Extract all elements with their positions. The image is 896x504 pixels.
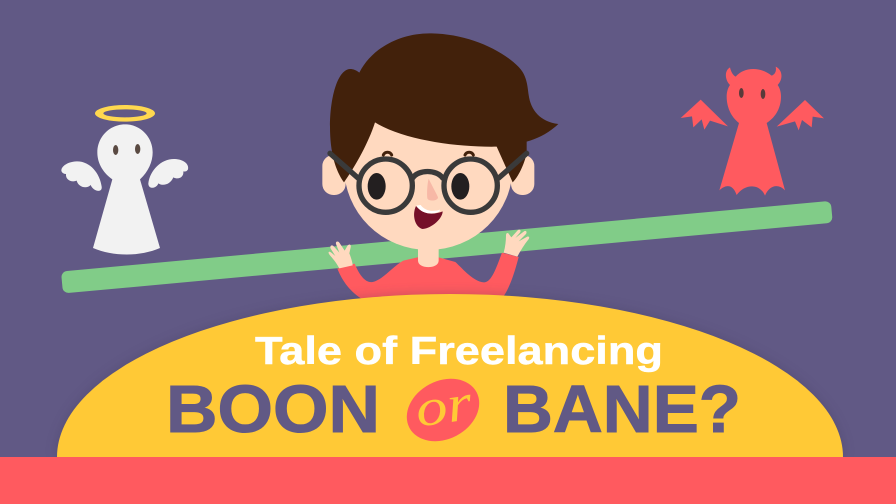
angel body <box>93 124 160 254</box>
ears <box>322 155 534 195</box>
right hand <box>504 230 529 257</box>
badge: or: or <box>412 374 476 439</box>
nose <box>427 179 438 200</box>
seesaw plank <box>61 201 833 293</box>
devil eyes <box>739 88 765 99</box>
neck <box>418 243 439 267</box>
angel <box>61 105 188 254</box>
left wing <box>681 100 728 130</box>
title: Tale of Freelancing: Tale of Freelancing <box>255 330 663 373</box>
angel eyes <box>113 144 140 155</box>
halo <box>95 105 155 122</box>
left wing <box>61 161 102 191</box>
right wing <box>777 100 824 130</box>
glasses <box>330 153 527 212</box>
head <box>344 83 513 250</box>
heading: BANE?: BANE? <box>503 372 741 447</box>
devil body <box>719 67 785 196</box>
badge: or <box>396 367 490 453</box>
yellow dome <box>57 294 843 457</box>
devil <box>681 67 824 196</box>
right wing <box>148 159 188 188</box>
bottom band <box>0 457 896 504</box>
character: freelancer <box>322 33 558 300</box>
heading: BOON: BOON <box>166 372 380 447</box>
eyebrows <box>383 152 473 155</box>
eyes <box>368 173 469 200</box>
dome shadow <box>57 294 843 457</box>
left hand <box>329 242 353 268</box>
hair <box>330 33 558 182</box>
mouth <box>414 206 443 229</box>
shirt and arms <box>337 253 519 300</box>
